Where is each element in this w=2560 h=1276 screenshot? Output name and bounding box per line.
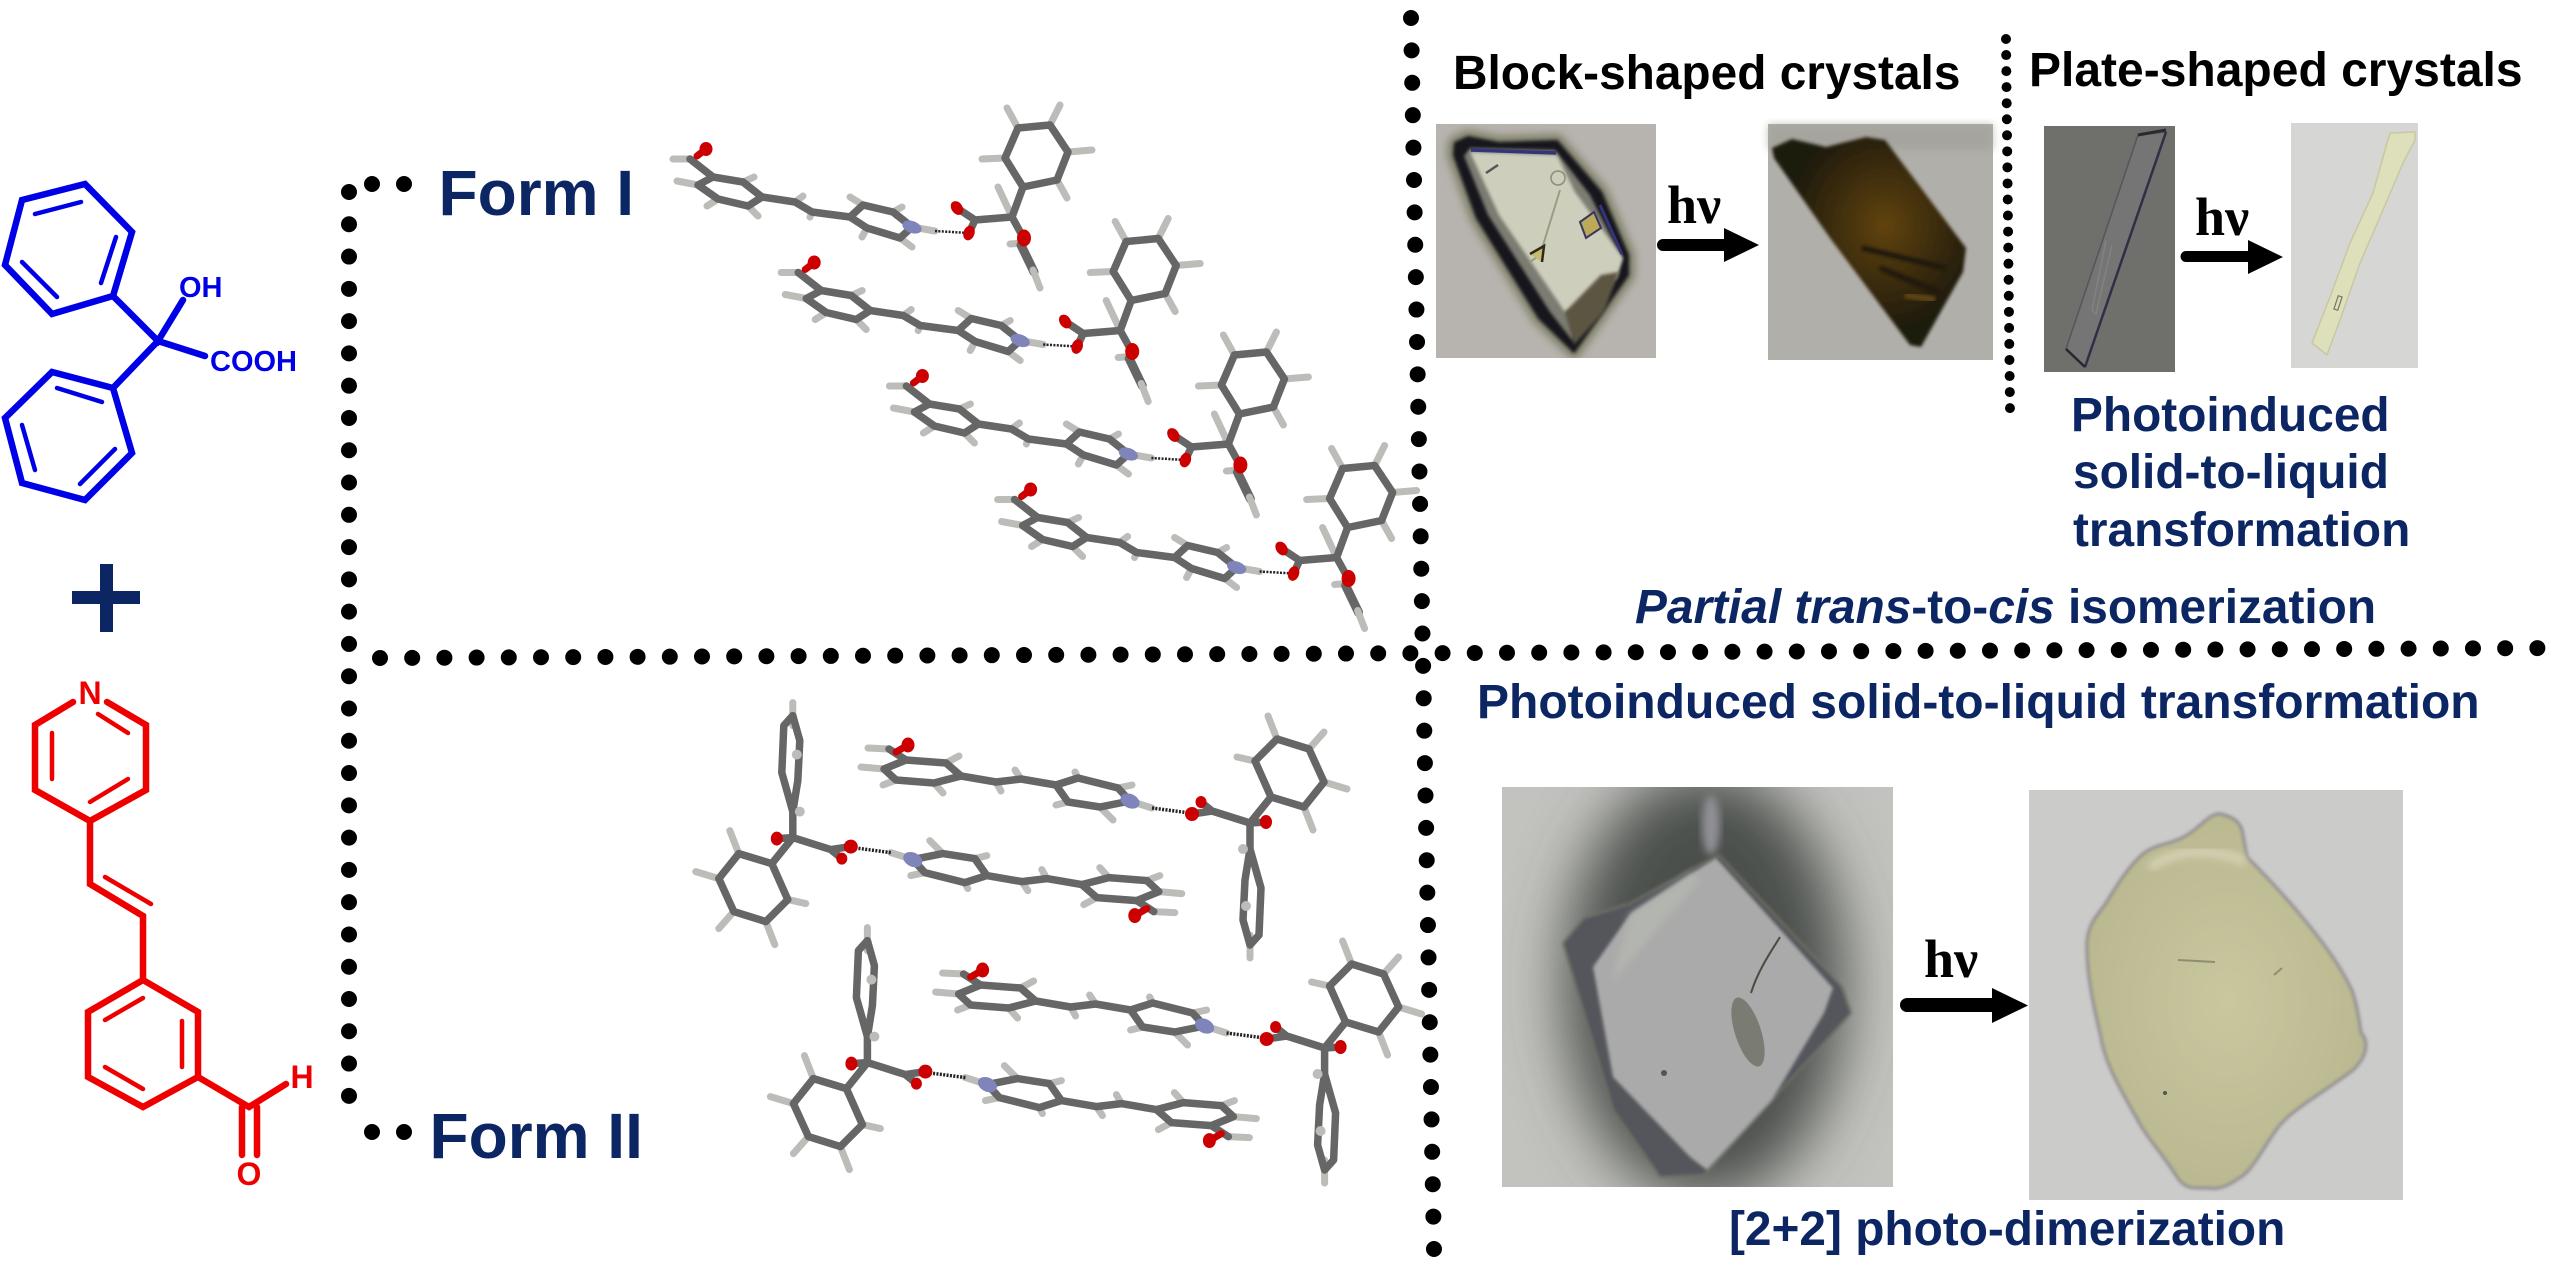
arrow: Form II crystal irradiation [1900, 988, 2028, 1023]
photo: block crystal after irradiation [1768, 124, 1993, 360]
heading: Form II transformation: Photoinduced solid-to-liquid transformation [1477, 676, 2480, 729]
label: h nu: hν [2195, 187, 2249, 247]
arrow: block crystal irradiation [1657, 228, 1759, 262]
crystal packing: Form II [696, 703, 1422, 1183]
heading: Form II: Form II [430, 1100, 643, 1172]
photo: plate crystal after irradiation [2291, 123, 2418, 368]
caption: plate crystals outcome: Photoinduced [2071, 389, 2390, 442]
label: h nu: hν [1667, 175, 1721, 235]
molecule: styryl pyridine aldehyde (red) [35, 675, 314, 1192]
arrow: plate crystal irradiation [2180, 240, 2283, 274]
photo: Form II crystal before irradiation [1502, 770, 1893, 1200]
caption: plate crystals outcome: solid-to-liquid [2073, 446, 2389, 499]
crystal packing: Form I [673, 105, 1417, 628]
photo: Form II crystal after irradiation [2029, 790, 2403, 1200]
molecule: styryl pyridine aldehyde (red): H [290, 1059, 314, 1095]
heading: Form I: Form I [438, 157, 634, 229]
molecule: benzilic acid (blue): OH [179, 272, 222, 304]
molecule: styryl pyridine aldehyde (red): N [78, 675, 102, 711]
caption: photo-dimerization: [2+2] photo-dimerization [1729, 1203, 2285, 1256]
caption: plate crystals outcome [2071, 389, 2410, 557]
caption: partial isomerization: Partial trans-to-cis isomerization [1635, 581, 2376, 634]
photo: plate crystal before irradiation [2044, 126, 2175, 372]
molecule: benzilic acid (blue): COOH [210, 346, 297, 378]
divider dots between block and plate panels [2006, 39, 2010, 410]
plus sign [72, 564, 140, 632]
heading: plate-shaped crystals: Plate-shaped crystals [2029, 44, 2523, 97]
caption: plate crystals outcome: transformation [2073, 504, 2410, 557]
label: h nu: hν [1924, 929, 1978, 989]
photo: block crystal before irradiation [1436, 124, 1656, 358]
molecule: benzilic acid (blue) [5, 184, 297, 500]
heading: block-shaped crystals: Block-shaped crystals [1453, 47, 1960, 100]
molecule: styryl pyridine aldehyde (red): O [237, 1156, 261, 1192]
